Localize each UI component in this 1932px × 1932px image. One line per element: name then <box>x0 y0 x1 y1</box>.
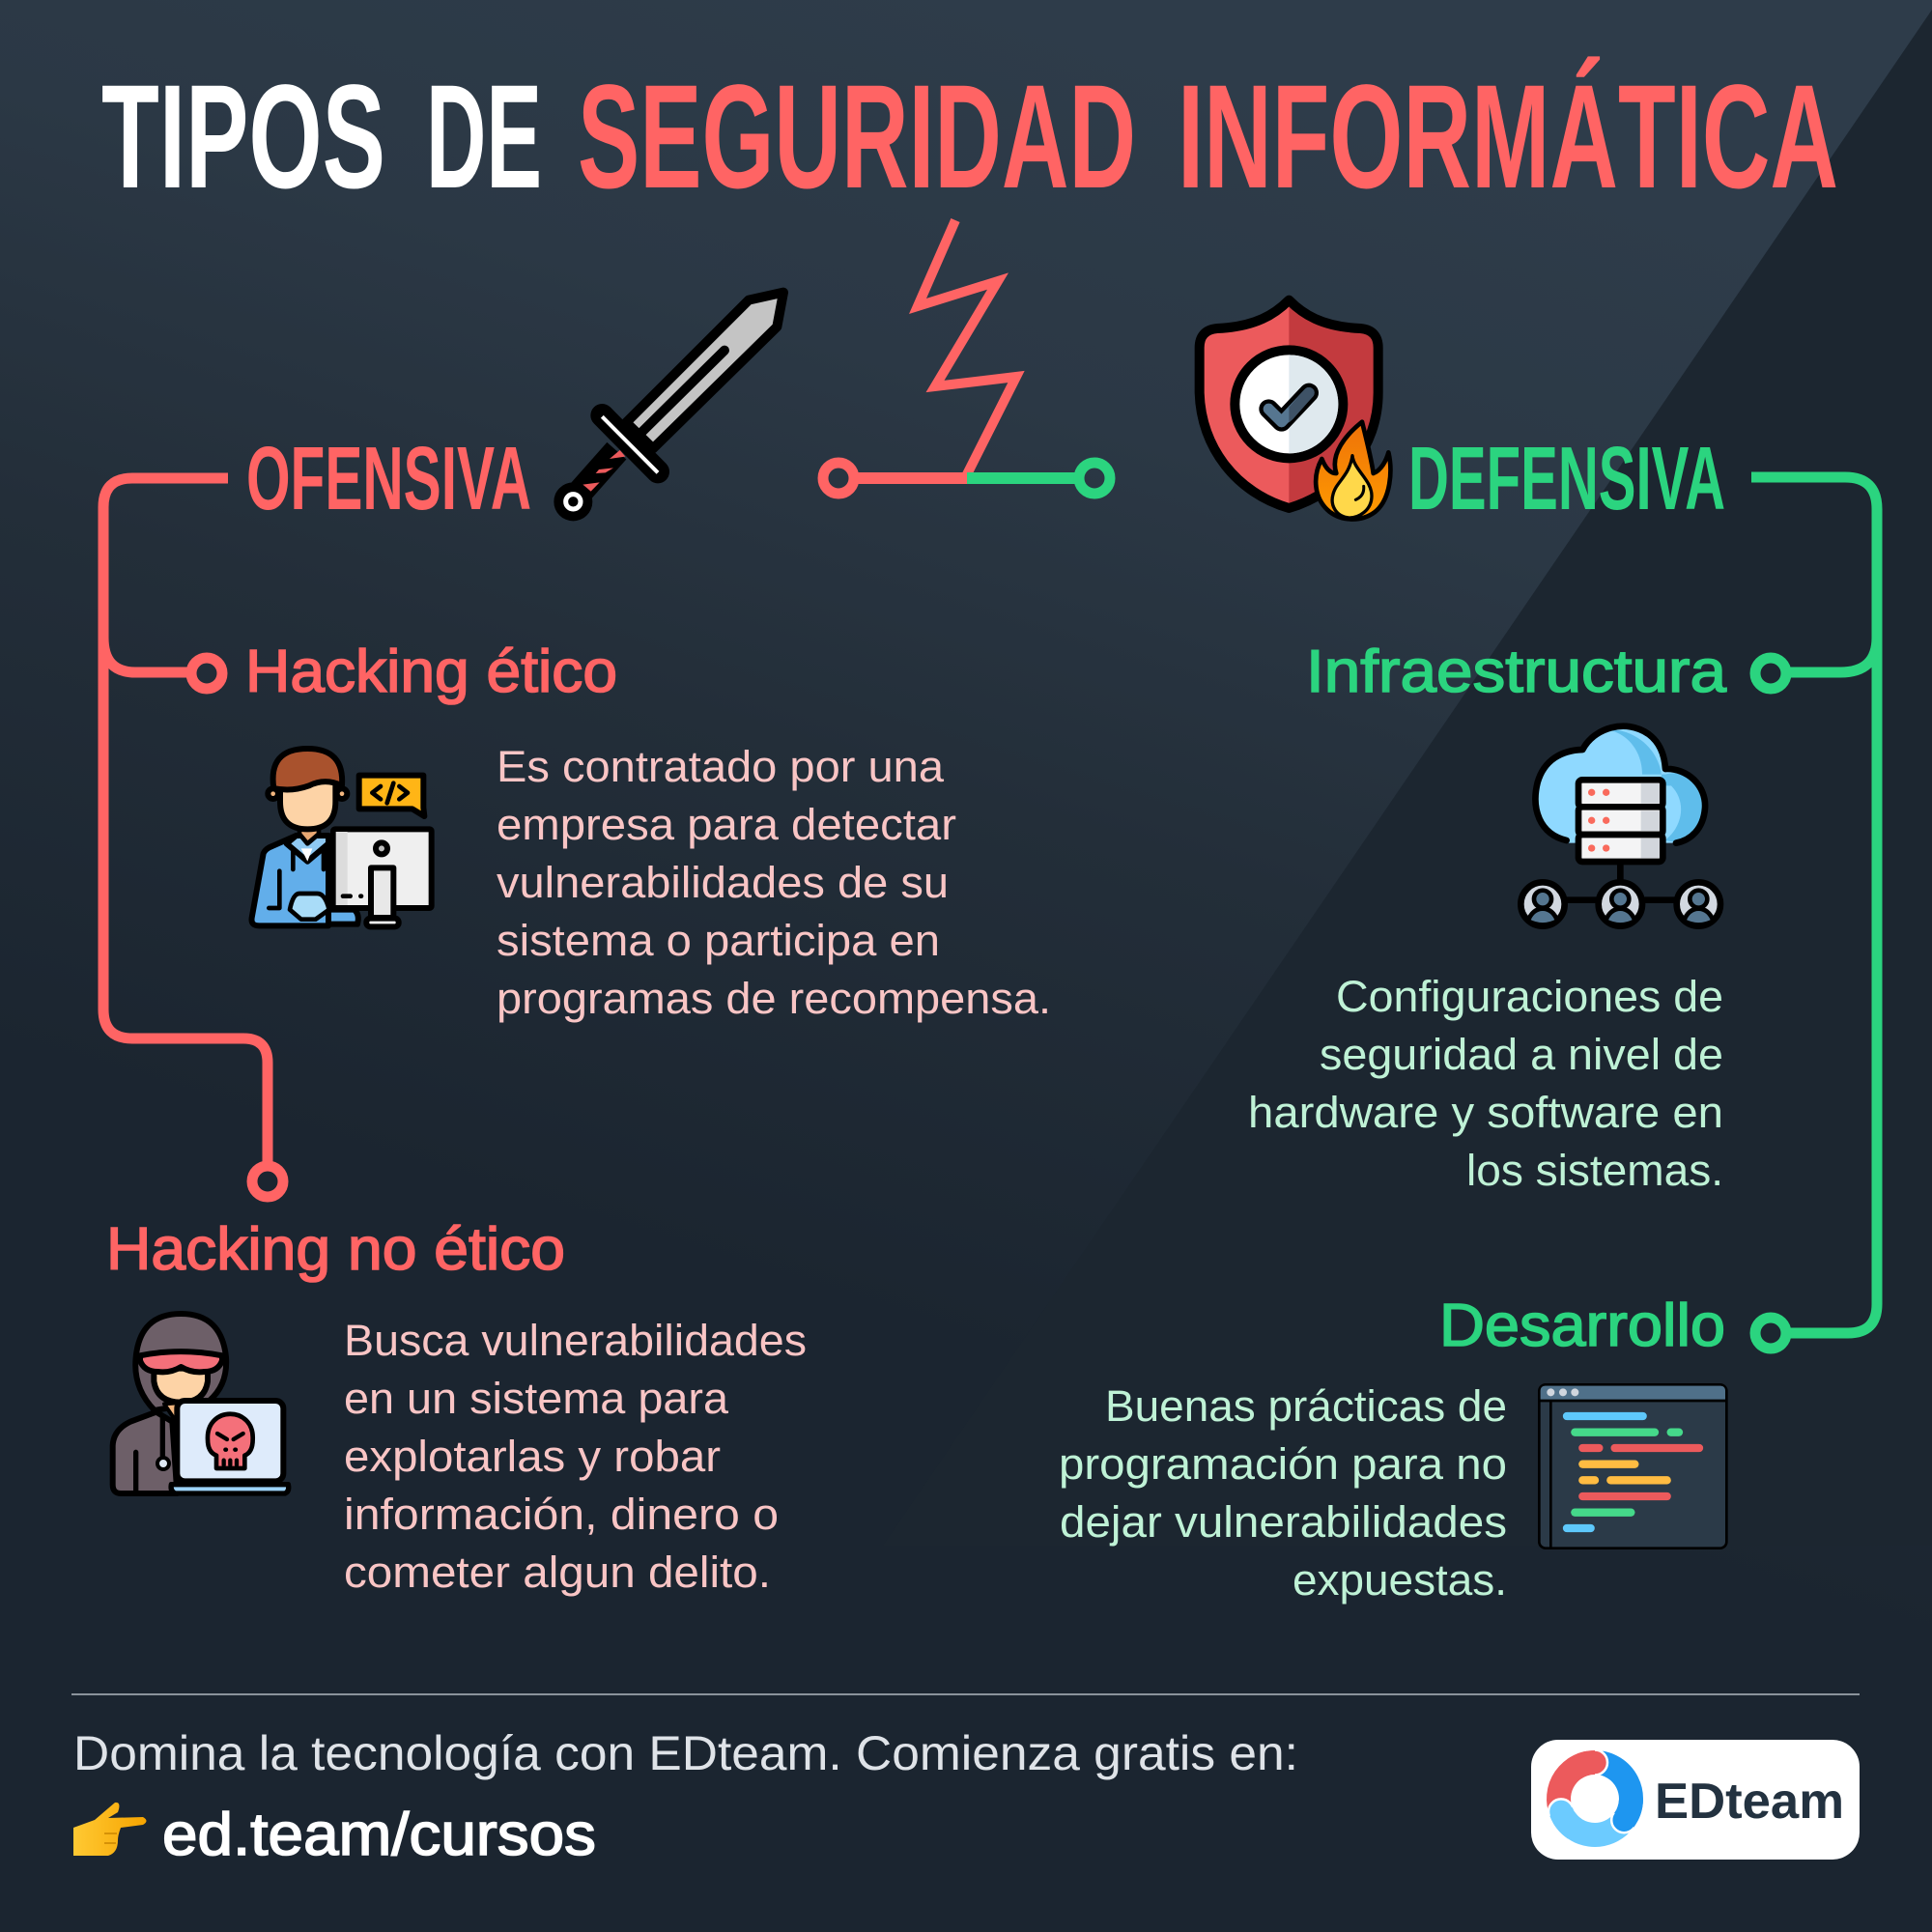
text: hacking no etico description: Busca vulnerabilidades <box>344 1316 807 1365</box>
footer divider <box>71 1693 1860 1695</box>
title <box>101 54 1838 219</box>
title: DE <box>426 54 542 219</box>
heading: desarrollo: Desarrollo <box>1439 1293 1725 1359</box>
icon: sword <box>554 293 783 521</box>
text: hacking no etico description: cometer algun delito. <box>344 1548 771 1597</box>
text: desarrollo description: expuestas. <box>1293 1555 1507 1605</box>
logo: EDteam <box>1531 1740 1860 1860</box>
text: desarrollo description: programación para no <box>1059 1439 1507 1489</box>
text: hacking no etico description: en un sistema para <box>344 1374 729 1423</box>
connector: defensive branches <box>1751 477 1877 1349</box>
text: infraestructura description: hardware y software en <box>1248 1088 1723 1137</box>
heading: ofensiva: OFENSIVA <box>246 428 531 528</box>
icon: shield with fire <box>1200 300 1390 519</box>
text: hacking etico description: empresa para detectar <box>497 800 956 849</box>
logo: EDteam: EDteam <box>1655 1774 1844 1830</box>
text: hacking etico description <box>497 742 1051 1023</box>
title: TIPOS <box>101 54 385 219</box>
text: hacking etico description: programas de recompensa. <box>497 974 1051 1023</box>
text: hacking etico description: Es contratado por una <box>497 742 945 791</box>
heading: infraestructura: Infraestructura <box>1306 639 1727 705</box>
heading: hacking etico: Hacking ético <box>245 639 617 705</box>
icon: malicious hacker with laptop <box>113 1314 289 1493</box>
icon: code window <box>1539 1384 1726 1548</box>
text: hacking etico description: vulnerabilidades de su <box>497 858 949 907</box>
icon: pointing hand <box>73 1803 147 1856</box>
text: desarrollo description: Buenas prácticas de <box>1105 1381 1507 1431</box>
text: infraestructura description: los sistemas. <box>1466 1146 1723 1195</box>
text: infraestructura description: seguridad a nivel de <box>1320 1030 1723 1079</box>
icon: ethical hacker at computer <box>251 749 432 926</box>
lightning connector <box>823 220 1110 494</box>
connector: offensive branches <box>103 478 283 1197</box>
text: hacking no etico description <box>344 1316 807 1597</box>
text: hacking etico description: sistema o participa en <box>497 916 940 965</box>
icon: cloud server network <box>1520 726 1720 926</box>
heading: hacking no etico: Hacking no ético <box>106 1216 565 1283</box>
heading: defensiva: DEFENSIVA <box>1408 428 1725 528</box>
text: hacking no etico description: explotarlas y robar <box>344 1432 721 1481</box>
footer link: ed.team/cursos <box>162 1802 596 1868</box>
title: SEGURIDAD <box>578 54 1136 219</box>
text: desarrollo description: dejar vulnerabilidades <box>1060 1497 1507 1547</box>
text: hacking no etico description: información, dinero o <box>344 1490 779 1539</box>
text: infraestructura description: Configuraciones de <box>1336 972 1723 1021</box>
footer call to action: Domina la tecnología con EDteam. Comienza gratis en: <box>73 1726 1298 1780</box>
text: desarrollo description <box>1059 1381 1507 1605</box>
text: infraestructura description <box>1248 972 1723 1195</box>
